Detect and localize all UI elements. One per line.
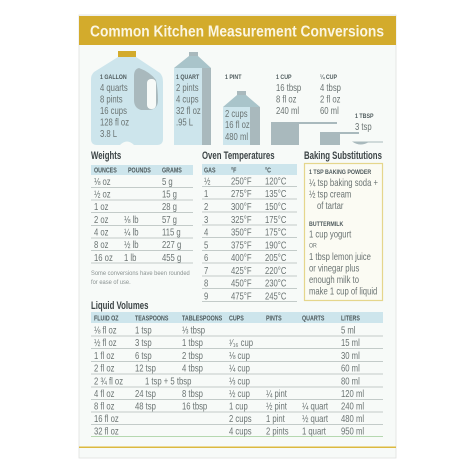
weights table: 1 lb: [124, 252, 136, 263]
icon: quart carton with text: 4 cups: [176, 94, 199, 105]
oven temperatures table: 4: [204, 227, 208, 238]
oven temperatures table: 1: [204, 188, 208, 199]
oven temperatures table: 400°F: [231, 252, 252, 263]
baking substitutions box: BUTTERMILK: [309, 220, 344, 228]
oven temperatures heading: Oven Temperatures: [202, 150, 275, 162]
icon: pint carton with text: 480 ml: [225, 131, 248, 142]
baking substitutions box: ¼ tsp baking soda +: [309, 177, 378, 188]
icon: gallon jug with text: 1 GALLON: [100, 73, 127, 81]
icon: pint carton with text: 2 cups: [225, 108, 248, 119]
weights table: 2 oz: [94, 214, 109, 225]
baking substitutions box: [304, 164, 382, 300]
liquid volumes table: ¼ cup: [229, 363, 250, 374]
weights table: POUNDS: [128, 167, 151, 175]
liquid volumes table: 2 pints: [266, 426, 289, 437]
icon: pint carton with text: 1 PINT: [225, 73, 242, 81]
liquid volumes table: 16 fl oz: [94, 413, 119, 424]
weights table: GRAMS: [162, 167, 182, 175]
liquid volumes table: 8 fl oz: [94, 401, 115, 412]
icon: quarter cup measure with text: ¼ CUP: [320, 73, 337, 81]
icon: gallon jug with text: 4 quarts: [100, 82, 128, 93]
liquid volumes table: ½ pint: [266, 401, 287, 412]
weights table: 1 oz: [94, 201, 109, 212]
card background: [79, 15, 396, 458]
liquid volumes table: 240 ml: [341, 401, 364, 412]
oven temperatures table: 325°F: [231, 214, 252, 225]
weights heading: Weights: [91, 150, 121, 162]
icon: one cup measure with text: 240 ml: [276, 105, 299, 116]
oven temperatures table: 135°C: [265, 188, 287, 199]
oven temperatures table: 425°F: [231, 265, 252, 276]
weights table: 8 oz: [94, 239, 109, 250]
oven temperatures table: 3: [204, 214, 208, 225]
icon: gallon jug with text: 16 cups: [100, 105, 127, 116]
weights table: 5 g: [162, 176, 173, 187]
icon: quarter cup measure with text: 4 tbsp: [320, 82, 341, 93]
baking substitutions box: 1 tbsp lemon juice: [309, 251, 371, 262]
liquid volumes table: 480 ml: [341, 413, 364, 424]
icon: one cup measure with text: 16 tbsp: [276, 82, 301, 93]
icon: pint carton with text: [223, 73, 260, 145]
liquid volumes table: 15 ml: [341, 337, 360, 348]
liquid volumes table: ⅛ fl oz: [94, 325, 117, 336]
liquid volumes table: LITERS: [341, 315, 360, 323]
liquid volumes table: ½ cup: [229, 388, 250, 399]
oven temperatures table: 7: [204, 265, 208, 276]
liquid volumes table: ⅓ tbsp: [182, 325, 205, 336]
weights table: 57 g: [162, 214, 177, 225]
icon: quart carton with text: 32 fl oz: [176, 105, 201, 116]
liquid volumes table: 120 ml: [341, 388, 364, 399]
liquid volumes table: 60 ml: [341, 363, 360, 374]
liquid volumes table: TABLESPOONS: [182, 315, 222, 323]
oven temperatures table: GAS: [204, 167, 216, 175]
title banner: Common Kitchen Measurement Conversions: [90, 24, 384, 40]
oven temperatures table: 230°C: [265, 278, 287, 289]
weights table: 115 g: [162, 227, 181, 238]
icon: gallon jug with text: 128 fl oz: [100, 117, 130, 128]
liquid volumes table: 1 cup: [229, 401, 248, 412]
liquid volumes heading: Liquid Volumes: [91, 300, 148, 312]
oven temperatures table: 450°F: [231, 278, 252, 289]
liquid volumes table: 4 tbsp: [182, 363, 203, 374]
weights table: [91, 165, 193, 263]
oven temperatures table: 8: [204, 278, 208, 289]
liquid volumes table: ¼ quart: [302, 401, 329, 412]
baking substitutions box: 1 TSP BAKING POWDER: [309, 168, 372, 176]
liquid volumes table: 80 ml: [341, 376, 360, 387]
liquid volumes table: 24 tsp: [135, 388, 156, 399]
icon: gallon jug with text: [91, 51, 163, 145]
oven temperatures table: 120°C: [265, 176, 287, 187]
weights table: ⅛ oz: [94, 176, 111, 187]
baking substitutions box: enough milk to: [309, 274, 359, 285]
baking substitutions heading: Baking Substitutions: [304, 150, 382, 162]
weights table: ½ lb: [124, 239, 139, 250]
icon: tablespoon with text: [352, 112, 383, 145]
liquid volumes table: 1 tsp: [135, 325, 152, 336]
oven temperatures table: 150°C: [265, 201, 287, 212]
liquid volumes table: 1 tbsp: [182, 337, 203, 348]
liquid volumes table: ½ quart: [302, 413, 329, 424]
liquid volumes table: 30 ml: [341, 350, 360, 361]
liquid volumes table: 6 tsp: [135, 350, 152, 361]
icon: pint carton with text: 16 fl oz: [225, 119, 250, 130]
liquid volumes table: TEASPOONS: [135, 315, 168, 323]
weights table: ⅛ lb: [124, 214, 139, 225]
liquid volumes table: 1 tsp + 5 tbsp: [145, 376, 191, 387]
weights table: OUNCES: [94, 167, 117, 175]
liquid volumes table: 2 ¾ fl oz: [94, 376, 124, 387]
liquid volumes table: 3 tsp: [135, 337, 152, 348]
baking substitutions box: OR: [309, 243, 317, 250]
oven temperatures table: 205°C: [265, 252, 287, 263]
oven temperatures table: 275°F: [231, 188, 252, 199]
liquid volumes table: ¹⁄₁₆ cup: [229, 337, 253, 348]
weights table: ½ oz: [94, 189, 111, 200]
oven temperatures table: 175°C: [265, 214, 287, 225]
oven temperatures table: 300°F: [231, 201, 252, 212]
liquid volumes table: 2 cups: [229, 413, 252, 424]
rounding note: [91, 270, 190, 286]
baking substitutions box: ½ tsp cream: [309, 189, 351, 200]
liquid volumes table: ⅓ cup: [229, 376, 250, 387]
title banner: [79, 16, 396, 45]
weights table: 4 oz: [94, 227, 109, 238]
liquid volumes table: CUPS: [229, 315, 244, 323]
icon: quart carton with text: .95 L: [176, 117, 193, 128]
liquid volumes table: 2 fl oz: [94, 363, 115, 374]
oven temperatures table: ½: [204, 176, 211, 187]
liquid volumes table: ⅛ cup: [229, 350, 250, 361]
liquid volumes table: 32 fl oz: [94, 426, 119, 437]
weights table: 15 g: [162, 189, 177, 200]
oven temperatures table: 475°F: [231, 291, 252, 302]
icon: tablespoon with text: 1 TBSP: [355, 112, 374, 120]
icon: quarter cup measure with text: 2 fl oz: [320, 94, 341, 105]
liquid volumes table: 12 tsp: [135, 363, 156, 374]
icon: quart carton with text: [174, 52, 211, 145]
liquid volumes table: 8 tbsp: [182, 388, 203, 399]
oven temperatures table: 175°C: [265, 227, 287, 238]
bottom gold rule: [79, 446, 396, 448]
liquid volumes table: 1 pint: [266, 413, 285, 424]
liquid volumes table: 4 cups: [229, 426, 252, 437]
oven temperatures table: 245°C: [265, 291, 287, 302]
icon: gallon jug with text: 8 pints: [100, 94, 123, 105]
liquid volumes table: 4 fl oz: [94, 388, 115, 399]
icon: gallon jug with text: 3.8 L: [100, 128, 117, 139]
oven temperatures table: 375°F: [231, 240, 252, 251]
oven temperatures table: 6: [204, 252, 208, 263]
icon: quarter cup measure with text: [320, 73, 359, 145]
icon: quart carton with text: 1 QUART: [176, 73, 199, 81]
oven temperatures table: 9: [204, 291, 208, 302]
icon: one cup measure with text: [271, 73, 337, 145]
liquid volumes table: 16 tbsp: [182, 401, 207, 412]
weights table: 16 oz: [94, 252, 113, 263]
liquid volumes table: 48 tsp: [135, 401, 156, 412]
weights table: 227 g: [162, 239, 181, 250]
liquid volumes table: ½ fl oz: [94, 337, 117, 348]
rounding note: for ease of use.: [91, 279, 131, 286]
liquid volumes table: 1 quart: [302, 426, 326, 437]
liquid volumes table: [91, 312, 383, 437]
weights table: 455 g: [162, 252, 181, 263]
liquid volumes table: QUARTS: [302, 315, 324, 323]
liquid volumes table: 1 fl oz: [94, 350, 115, 361]
oven temperatures table: 250°F: [231, 176, 252, 187]
weights table: 28 g: [162, 201, 177, 212]
rounding note: Some conversions have been rounded: [91, 270, 190, 277]
oven temperatures table: 220°C: [265, 265, 287, 276]
liquid volumes table: 950 ml: [341, 426, 364, 437]
oven temperatures table: [202, 164, 297, 302]
icon: quart carton with text: 2 pints: [176, 82, 199, 93]
baking substitutions box: 1 cup yogurt: [309, 229, 352, 240]
oven temperatures table: 5: [204, 240, 208, 251]
liquid volumes table: 2 tbsp: [182, 350, 203, 361]
baking substitutions box: or vinegar plus: [309, 263, 360, 274]
icon: one cup measure with text: 1 CUP: [276, 73, 292, 81]
liquid volumes table: PINTS: [266, 315, 282, 323]
baking substitutions box: make 1 cup of liquid: [309, 286, 377, 297]
baking substitutions box: of tartar: [317, 200, 344, 211]
icon: quarter cup measure with text: 60 ml: [320, 105, 339, 116]
oven temperatures table: 190°C: [265, 240, 287, 251]
liquid volumes table: 5 ml: [341, 325, 356, 336]
liquid volumes table: ¼ pint: [266, 388, 287, 399]
oven temperatures table: 350°F: [231, 227, 252, 238]
icon: tablespoon with text: 3 tsp: [355, 121, 372, 132]
icon: one cup measure with text: 8 fl oz: [276, 94, 297, 105]
oven temperatures table: 2: [204, 201, 208, 212]
oven temperatures table: °F: [231, 166, 236, 175]
oven temperatures table: °C: [265, 166, 271, 175]
liquid volumes table: FLUID OZ: [94, 315, 119, 323]
weights table: ¼ lb: [124, 227, 139, 238]
